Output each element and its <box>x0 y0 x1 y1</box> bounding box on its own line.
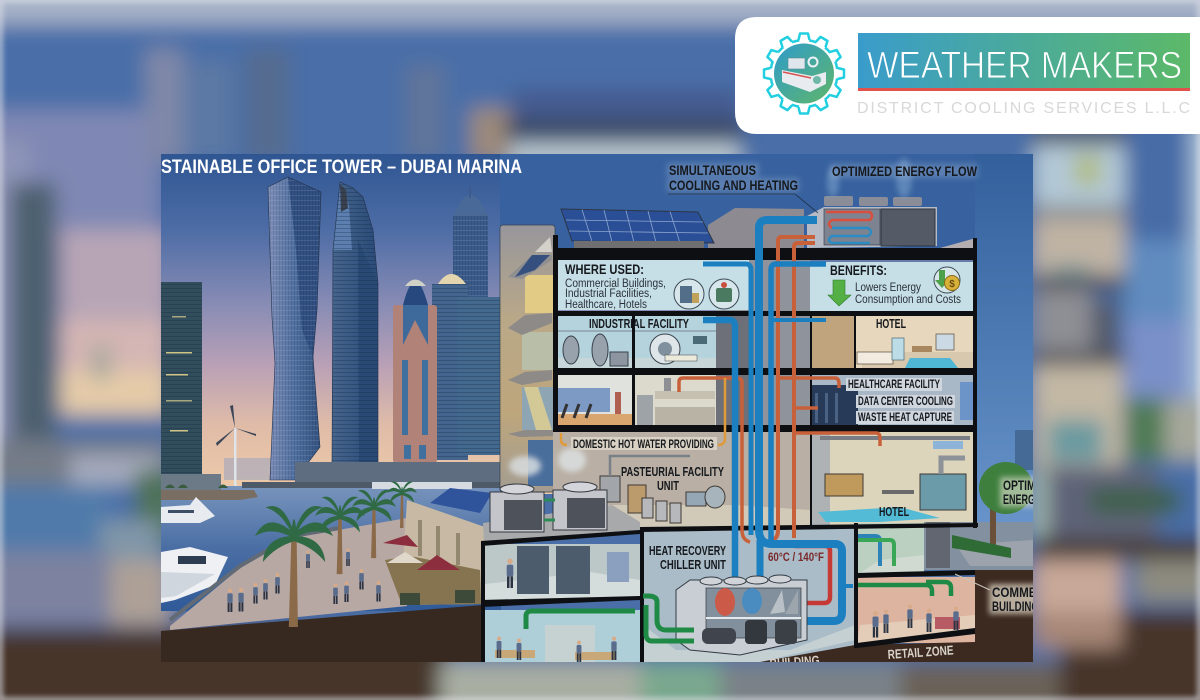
label: retail zone: RETAIL ZONE <box>887 642 954 662</box>
room: retail zone <box>857 577 975 644</box>
label: heat recovery chiller unit <box>649 543 726 572</box>
icon: down arrow <box>828 280 851 306</box>
label: industrial facility: INDUSTRIAL FACILITY <box>589 317 689 331</box>
label: heat recovery chiller unit: CHILLER UNIT <box>660 557 726 572</box>
pipes: green <box>643 596 694 641</box>
wind turbine <box>216 405 256 490</box>
upper sky behind building <box>500 154 975 250</box>
building core <box>716 260 810 425</box>
label: data center cooling: DATA CENTER COOLING <box>858 396 953 408</box>
restaurant <box>383 488 492 605</box>
room: data center <box>810 375 975 425</box>
room: hotel suite <box>810 316 975 368</box>
promenade <box>170 518 407 630</box>
chiller right <box>544 482 607 530</box>
main illustration <box>161 154 1072 671</box>
label: optimized energy clipped: ENERGY <box>1003 491 1041 507</box>
basement right <box>760 570 1033 662</box>
icon: savings coin <box>934 267 960 293</box>
label: pasteurial facility unit <box>621 464 724 493</box>
structural slabs <box>481 235 978 662</box>
pipes: return red <box>794 546 830 603</box>
solar array <box>561 209 714 248</box>
floor: pasteurial facility <box>509 432 810 527</box>
pipes: heating orange <box>561 237 880 542</box>
label: temperature: 60°C / 140°F <box>768 550 824 564</box>
label: waste heat capture: WASTE HEAT CAPTURE <box>858 412 952 424</box>
panel: where used <box>555 260 749 311</box>
label: commercial building clipped: COMMERCIAL <box>992 584 1072 600</box>
label: pasteurial facility unit: UNIT <box>657 478 679 493</box>
icon: savings coin: $ <box>949 279 955 290</box>
where used text: Healthcare, Hotels <box>565 299 647 311</box>
room: lower hotel lobby <box>810 432 975 525</box>
label: simultaneous cooling and heating <box>667 162 818 213</box>
railing <box>170 528 340 620</box>
room: kitchen <box>635 375 716 425</box>
label: optimized energy flow: OPTIMIZED ENERGY FLOW <box>832 163 978 179</box>
pipes: cooling blue <box>703 220 853 621</box>
chiller left <box>490 484 544 532</box>
pink tower <box>393 280 437 463</box>
rear crown tower <box>453 186 488 305</box>
benefits text: Consumption and Costs <box>855 292 961 306</box>
tower west facade <box>500 225 555 492</box>
label: commercial building clipped: BUILDING <box>992 598 1039 614</box>
heading: WHERE USED: <box>565 261 644 277</box>
label: healthcare facility <box>846 378 942 391</box>
logo card <box>735 17 1200 134</box>
label: domestic hot water: DOMESTIC HOT WATER PROVIDING <box>573 439 714 451</box>
curved blue tower <box>332 182 378 463</box>
label: building clipped: BUILDING <box>769 653 820 671</box>
benefits text: Lowers Energy <box>855 280 921 294</box>
pedestrians <box>227 548 381 612</box>
right sky <box>975 154 1033 522</box>
room: industrial facility <box>555 316 716 368</box>
far quay <box>161 474 510 500</box>
label: commercial building clipped <box>955 574 1072 614</box>
label: data center cooling <box>856 395 955 408</box>
water <box>161 486 501 611</box>
yacht lower <box>161 547 228 603</box>
room: service corridor <box>857 523 924 575</box>
logo tagline: DISTRICT COOLING SERVICES L.L.C <box>857 100 1190 117</box>
roof structure <box>708 208 804 248</box>
label: pasteurial facility unit: PASTEURIAL FACILITY <box>621 464 724 479</box>
label: optimized energy clipped: OPTIMIZED <box>1003 477 1059 493</box>
room: gym <box>555 375 632 425</box>
label: healthcare facility: HEALTHCARE FACILITY <box>848 379 940 391</box>
label: hotel: HOTEL <box>876 317 906 331</box>
right tall tower <box>468 297 500 455</box>
exterior street <box>924 430 1033 570</box>
icon: hotel bed <box>709 279 739 309</box>
where used text: Commercial Buildings, <box>565 278 666 290</box>
rooftop heat-pump unit <box>807 158 937 248</box>
chiller plant: heat recovery chiller unit <box>676 575 807 655</box>
twisting tower <box>268 177 321 480</box>
room: office <box>485 610 640 662</box>
palms <box>255 481 417 627</box>
icon: city buildings <box>674 279 704 309</box>
steam <box>509 456 541 476</box>
label: domestic hot water <box>571 437 717 451</box>
label: heat recovery chiller unit: HEAT RECOVERY <box>649 543 726 558</box>
label: waste heat capture <box>856 411 954 424</box>
left block tower <box>161 282 202 474</box>
panel: benefits <box>810 262 975 311</box>
heading: BENEFITS: <box>830 262 887 278</box>
room: chiller plant <box>643 527 855 662</box>
right wing roof <box>940 238 973 248</box>
rooftop terrace deck <box>483 505 640 542</box>
room: server room <box>485 544 640 600</box>
where used text <box>565 278 666 311</box>
distant city <box>224 458 271 480</box>
basement ground <box>161 605 483 662</box>
mid blue tower <box>432 274 468 460</box>
skyline towers <box>161 177 510 490</box>
sky <box>161 154 1033 494</box>
label: lower hotel: HOTEL <box>879 505 909 519</box>
icon: gear emblem <box>764 34 844 114</box>
label: simultaneous cooling and heating: SIMULTANEOUS <box>669 162 756 178</box>
label: optimized energy clipped <box>1000 477 1059 507</box>
logo banner <box>858 33 1190 91</box>
core dark shaft <box>716 316 748 425</box>
base podium <box>295 462 500 482</box>
yacht upper <box>161 497 215 523</box>
where used text: Industrial Facilities, <box>565 288 652 300</box>
benefits text <box>855 280 961 306</box>
label: title: STAINABLE OFFICE TOWER – DUBAI MARINA <box>161 156 522 178</box>
label: simultaneous cooling and heating: COOLING AND HEATING <box>669 177 798 193</box>
